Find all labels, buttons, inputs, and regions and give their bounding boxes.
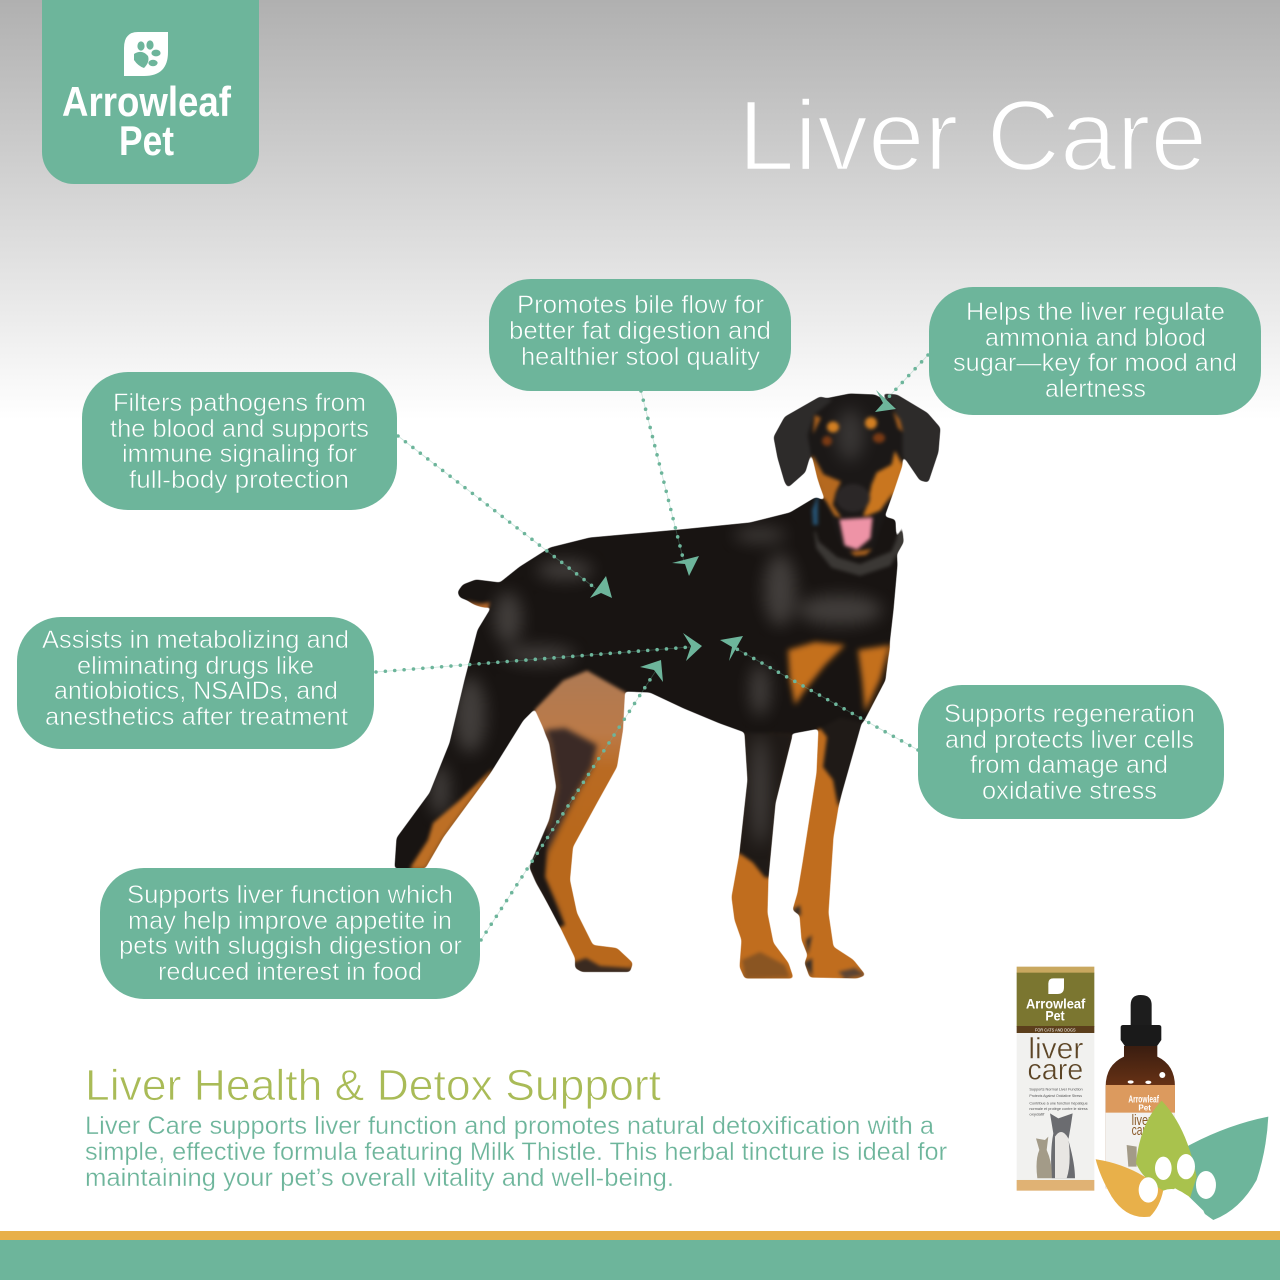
logo badge <box>42 0 259 184</box>
dog hind leg tan strip <box>410 768 493 868</box>
bottom band <box>0 1231 1280 1280</box>
dog near front leg <box>732 732 793 978</box>
callout: regulates ammonia: Helps the liver regulate <box>966 298 1225 326</box>
callout: appetite <box>100 868 480 999</box>
product box: Supports Normal Liver Function <box>1029 1086 1083 1091</box>
callout: regeneration: and protects liver cells <box>945 726 1194 754</box>
description text: Liver Care supports liver function and promotes natural detoxification with a <box>85 1112 934 1140</box>
callout: appetite: may help improve appetite in <box>128 907 452 935</box>
callout: metabolizing drugs: anesthetics after treatment <box>45 703 348 731</box>
product box: Contribue à une fonction hépatique <box>1029 1100 1088 1105</box>
gradient background <box>0 0 1280 420</box>
product bottle: Pet <box>1138 1103 1151 1113</box>
dog muzzle tan <box>813 457 840 517</box>
dog near hind leg <box>530 670 633 972</box>
product bottle: Arrowleaf <box>1128 1095 1159 1106</box>
callout: regeneration: Supports regeneration <box>944 700 1195 728</box>
description text: simple, effective formula featuring Milk Thistle. This herbal tincture is ideal for <box>85 1138 947 1166</box>
callout: filters pathogens: immune signaling for <box>122 440 357 468</box>
dog far front leg <box>793 705 865 978</box>
callout: filters pathogens: the blood and supports <box>110 415 369 443</box>
callout: filters pathogens: full-body protection <box>129 466 349 494</box>
product box: normale et protège contre le stress <box>1029 1106 1088 1111</box>
dog body and far hind leg <box>395 498 897 868</box>
callout: filters pathogens: Filters pathogens from <box>113 389 366 417</box>
product bottle: care <box>1132 1123 1152 1139</box>
title: Liver Care <box>738 80 1207 192</box>
callout: promotes bile flow: Promotes bile flow for <box>517 291 764 319</box>
callout: regulates ammonia: ammonia and blood <box>985 324 1206 352</box>
heading: liver health: Liver Health & Detox Support <box>85 1061 661 1110</box>
callout: metabolizing drugs: Assists in metabolizing and <box>42 626 349 654</box>
dog tail tan <box>467 600 490 608</box>
product box: Arrowleaf <box>1026 995 1086 1011</box>
illustration: doberman dog <box>395 394 940 978</box>
dog blue collar strap <box>812 495 818 525</box>
callout: regeneration: oxidative stress <box>982 777 1157 805</box>
dog collar <box>815 512 903 575</box>
logo badge: Pet <box>119 117 174 164</box>
description text: maintaining your pet’s overall vitality and well-being. <box>85 1164 674 1192</box>
description text <box>85 1112 947 1192</box>
product box: Protects Against Oxidative Stress <box>1029 1093 1082 1098</box>
callout: regeneration: from damage and <box>970 751 1168 779</box>
product bottle: liver <box>1132 1113 1152 1129</box>
arrowhead: drugs <box>683 633 702 661</box>
product box: Pet <box>1045 1008 1065 1024</box>
callout: metabolizing drugs: eliminating drugs like <box>77 652 314 680</box>
product box: oxydatif <box>1029 1112 1045 1117</box>
product box: care <box>1027 1053 1083 1086</box>
callout: filters pathogens <box>82 372 397 510</box>
callout: appetite: Supports liver function which <box>127 881 453 909</box>
icon: paw leaf <box>124 32 168 76</box>
callout: appetite: reduced interest in food <box>158 958 422 986</box>
product box: FOR CATS AND DOGS <box>1035 1027 1076 1032</box>
product box: liver <box>1028 1032 1084 1065</box>
arrowhead: spleen immune <box>590 576 612 598</box>
dog fur highlights <box>430 528 882 816</box>
arrowhead: appetite <box>640 660 663 682</box>
callout: promotes bile flow: healthier stool quality <box>521 343 760 371</box>
dog head <box>774 394 940 556</box>
callout: regulates ammonia: sugar—key for mood and <box>953 349 1237 377</box>
callout: promotes bile flow: better fat digestion and <box>509 317 771 345</box>
dotted leader lines <box>376 355 928 940</box>
callout: promotes bile flow <box>489 279 791 391</box>
callout: regulates ammonia: alertness <box>1045 375 1146 403</box>
logo wordmark: Arrowleaf <box>62 78 232 125</box>
callout: metabolizing drugs: antiobiotics, NSAIDs, and <box>54 677 338 705</box>
product bottle <box>1106 995 1175 1188</box>
arrowhead: ammonia <box>875 390 896 412</box>
callout: regeneration <box>918 685 1224 819</box>
icon: arrowleaf leaves with paw <box>1096 1101 1268 1222</box>
arrowhead: bile <box>672 556 699 576</box>
callout: metabolizing drugs <box>17 617 374 749</box>
callout: appetite: pets with sluggish digestion or <box>119 932 462 960</box>
product: box and bottle <box>1017 967 1268 1222</box>
callout: regulates ammonia <box>929 287 1261 415</box>
dog chest tan marks <box>788 642 890 712</box>
product box <box>1017 967 1094 1191</box>
arrowhead: regeneration <box>720 636 743 661</box>
